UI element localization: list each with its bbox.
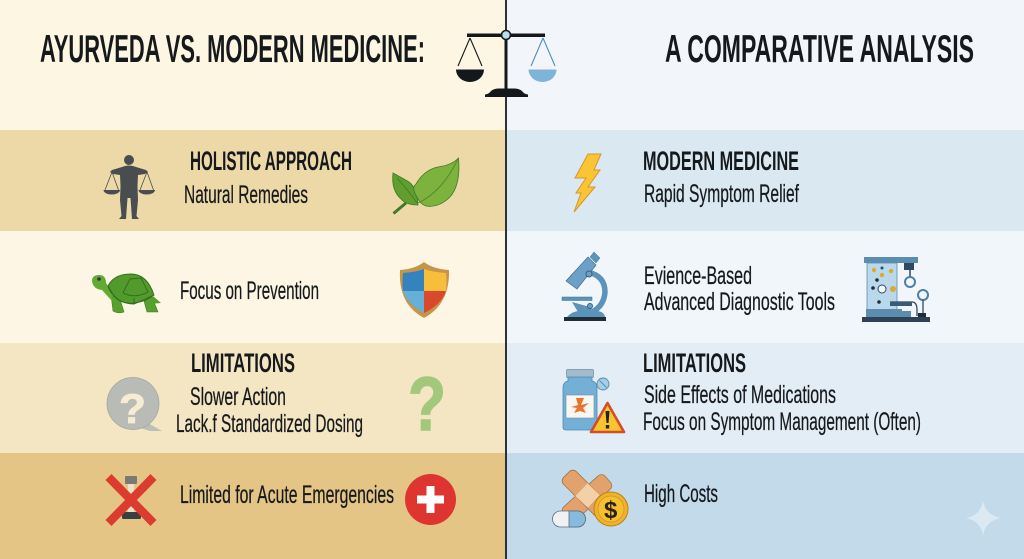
text: slower action: Slower Action — [190, 383, 286, 411]
row: prevention — [92, 262, 449, 318]
icon: microscope — [562, 252, 606, 321]
row: holistic approach — [104, 146, 459, 219]
icon: lab equipment — [862, 257, 930, 322]
text: focus on prevention: Focus on Prevention — [180, 277, 319, 305]
icon: bandage coin pill: $ — [604, 497, 618, 524]
heading: HOLISTIC APPROACH — [190, 146, 352, 176]
text: high costs: High Costs — [644, 480, 718, 508]
icon: balance scale — [456, 30, 556, 97]
heading: LIMITATIONS — [643, 348, 746, 378]
icon: leaf — [393, 158, 459, 214]
text: natural remedies: Natural Remedies — [184, 181, 308, 209]
icon: sparkle — [966, 500, 1001, 536]
icon: lightning bolt — [574, 154, 601, 212]
icon: crossed out device — [108, 476, 154, 523]
text: rapid relief: Rapid Symptom Relief — [644, 180, 799, 208]
heading: MODERN MEDICINE — [643, 146, 799, 176]
row: modern medicine — [574, 146, 799, 212]
row: evidence based — [562, 252, 930, 322]
icon: bandage coin pill — [552, 468, 628, 527]
heading: LIMITATIONS — [191, 348, 295, 378]
row: emergencies — [108, 474, 456, 525]
panel: modern medicine column — [506, 0, 1024, 559]
text: limited for emergencies: Limited for Acute Emergencies — [180, 481, 394, 509]
text: dosing: Lack.f Standardized Dosing — [176, 410, 363, 438]
row: high costs — [552, 468, 1001, 536]
row: limitations right — [563, 348, 921, 436]
icon: human figure with scales — [104, 155, 155, 219]
title left: AYURVEDA VS. MODERN MEDICINE: — [40, 28, 425, 71]
icon: green question mark: ? — [408, 362, 446, 447]
icon: turtle — [92, 274, 161, 313]
icon: question bubble — [107, 378, 162, 432]
row: limitations left — [107, 348, 446, 447]
text: evidence based: Evience-Based — [644, 262, 752, 290]
icon: medicine bottle with warning — [563, 370, 624, 432]
icon: shield — [400, 262, 449, 318]
icon: red cross — [405, 474, 456, 525]
icon: question bubble: ? — [119, 385, 146, 432]
text: side effects: Side Effects of Medications — [644, 381, 836, 409]
text: diagnostic tools: Advanced Diagnostic Tools — [644, 288, 835, 316]
panel: ayurveda column — [0, 0, 506, 559]
